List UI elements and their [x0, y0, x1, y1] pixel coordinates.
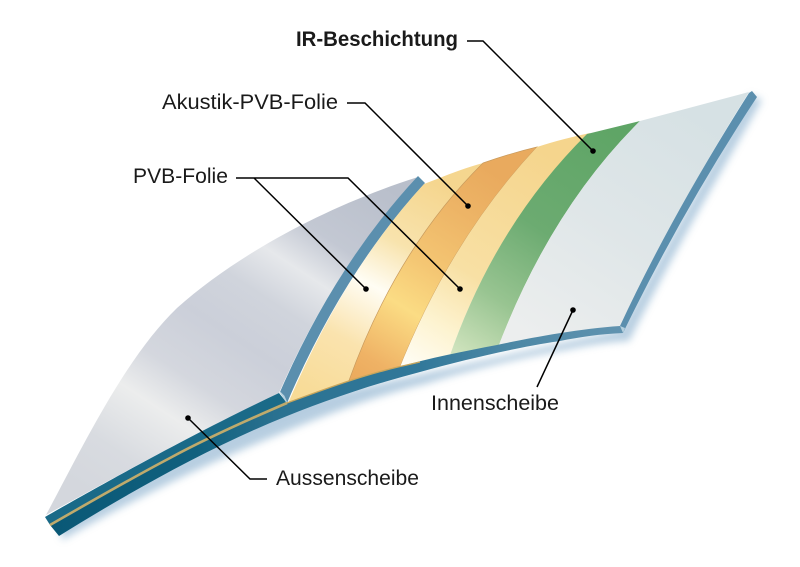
- label: IR-Beschichtung: IR-Beschichtung: [296, 27, 458, 51]
- diagram: laminated glass: [45, 91, 757, 536]
- label: Akustik-PVB-Folie: Akustik-PVB-Folie: [162, 90, 338, 114]
- layer: acoustic PVB film: [347, 147, 537, 386]
- corner facet: [280, 392, 287, 403]
- leader: Innenscheibe: [537, 307, 576, 387]
- inner pane corner facet: [620, 326, 625, 333]
- layer: IR coating: [449, 121, 640, 358]
- outer pane side edge: [280, 176, 425, 403]
- layer: PVB film one: [287, 163, 483, 406]
- outer pane surface: [46, 177, 418, 515]
- interlayer stripe right: [287, 362, 420, 403]
- leader: Aussenscheibe: [185, 415, 267, 479]
- label: PVB-Folie: PVB-Folie: [133, 164, 228, 188]
- leader: PVB-Folie: [236, 178, 463, 292]
- outer band upper part: [45, 393, 287, 525]
- interlayer stripe left: [50, 403, 287, 525]
- soft shadow under the glass: [60, 95, 762, 540]
- outer band lower part: [50, 403, 287, 536]
- layer: PVB film two: [398, 133, 590, 372]
- label: Aussenscheibe: Aussenscheibe: [276, 466, 419, 490]
- inner pane side edge: [620, 91, 757, 333]
- leader: IR-Beschichtung: [467, 41, 596, 154]
- leader: Akustik-PVB-Folie: [347, 103, 471, 209]
- inner pane surface: [497, 92, 749, 350]
- inner band front edge: [262, 326, 623, 423]
- label: Innenscheibe: Innenscheibe: [431, 391, 559, 415]
